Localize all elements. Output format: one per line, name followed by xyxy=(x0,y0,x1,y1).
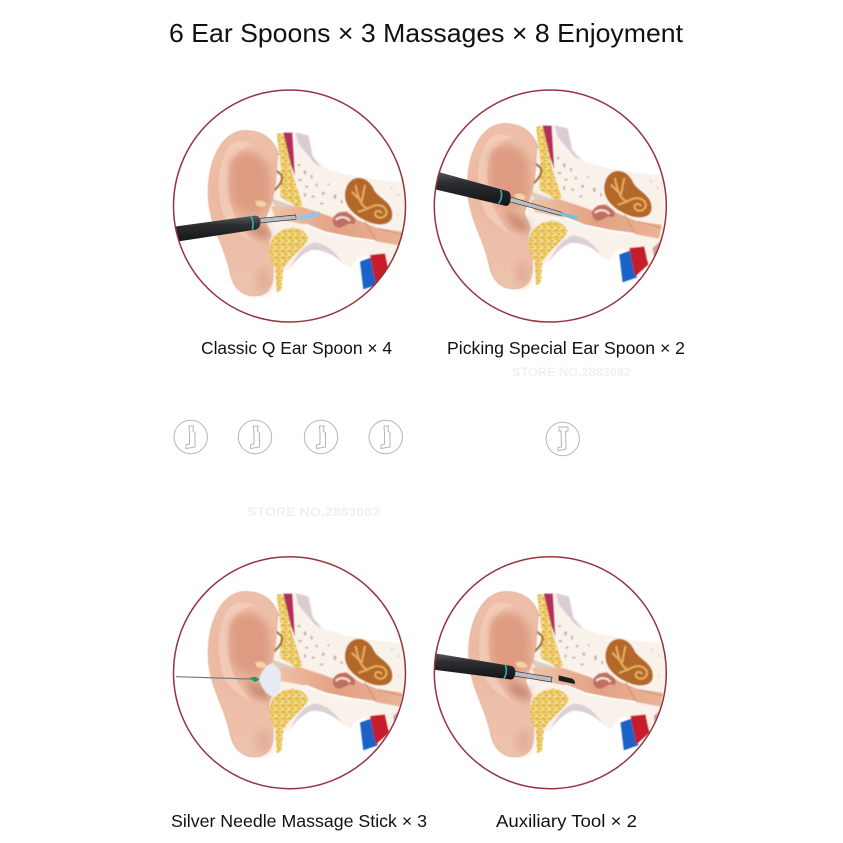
circle outline xyxy=(174,90,406,322)
label: silver needle massage stick: Silver Needle Massage Stick × 3 xyxy=(171,811,427,831)
panel: picking special ear spoon xyxy=(431,90,666,322)
illustration: ear with spoon tool xyxy=(172,131,406,296)
circle outline xyxy=(434,90,666,322)
icon: ear spoon 2 xyxy=(238,420,272,454)
watermark: store number right: STORE NO.2883082 xyxy=(512,367,631,379)
panel: auxiliary tool xyxy=(431,557,666,789)
tool: ear spoon camera xyxy=(172,212,320,242)
icon: ear spoon 1 xyxy=(174,420,207,454)
icon: ear spoon 4 xyxy=(369,420,402,454)
icon: picking spoon xyxy=(546,422,579,456)
label: auxiliary tool: Auxiliary Tool × 2 xyxy=(496,811,637,831)
ear anatomy xyxy=(208,592,406,757)
tool: auxiliary tool camera xyxy=(431,653,575,684)
illustration: ear with needle xyxy=(176,592,406,757)
circle outline xyxy=(174,557,406,789)
illustration: ear with angled tool xyxy=(431,124,665,289)
icon: ear spoon 3 xyxy=(304,420,338,454)
infographic canvas xyxy=(170,23,684,830)
tool: picking spoon camera xyxy=(431,170,578,220)
tool: silver needle with light cone xyxy=(176,663,281,696)
panel: silver needle massage stick xyxy=(174,557,406,789)
illustration: ear with auxiliary tool xyxy=(431,592,666,757)
label: picking special ear spoon: Picking Special Ear Spoon × 2 xyxy=(447,338,685,358)
circle outline xyxy=(434,557,666,789)
panel: classic Q ear spoon xyxy=(172,90,406,322)
ear anatomy xyxy=(468,124,665,289)
ear anatomy xyxy=(208,131,406,296)
label: classic Q ear spoon: Classic Q Ear Spoon × 4 xyxy=(201,338,392,358)
watermark: store number left: STORE NO.2883082 xyxy=(247,505,380,519)
ear anatomy xyxy=(469,592,666,757)
title: 6 Ear Spoons × 3 Massages × 8 Enjoyment xyxy=(169,18,684,48)
